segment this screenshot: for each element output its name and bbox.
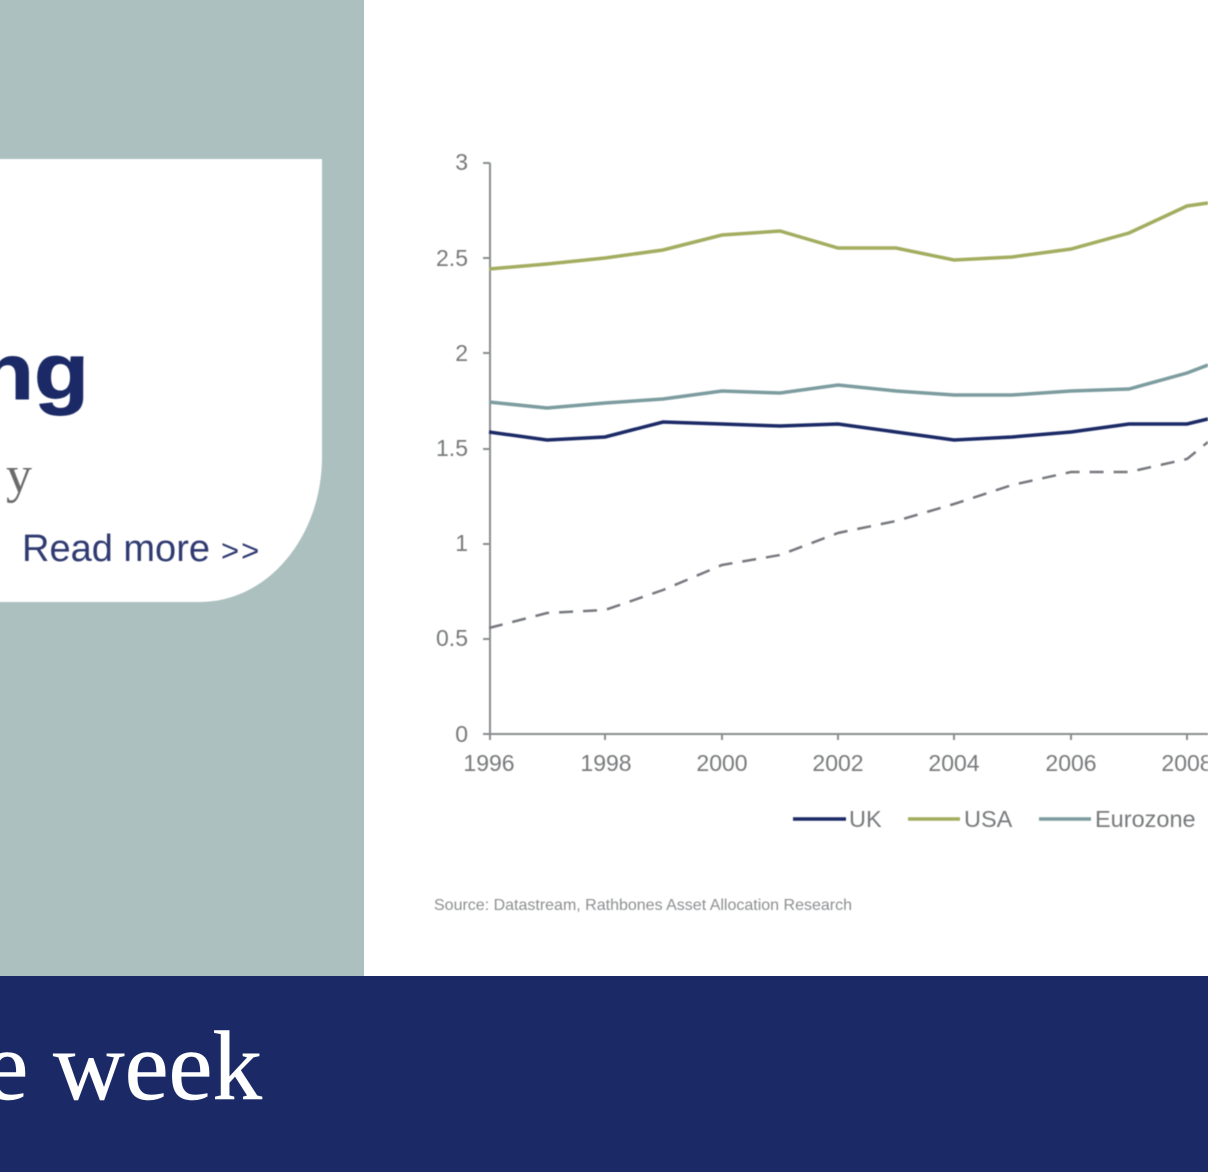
legend: Eurozone <box>1095 806 1196 832</box>
y axis labels: 0.5 <box>436 625 468 651</box>
panel: sage sidebar <box>0 0 364 976</box>
y axis labels: 2.5 <box>436 245 468 271</box>
legend: USA <box>964 806 1013 832</box>
x axis labels <box>463 750 1208 776</box>
series: UK <box>489 419 1208 440</box>
panel: white headline card: >> <box>221 533 261 568</box>
source note: Source: Datastream, Rathbones Asset Allocation Research <box>434 897 852 914</box>
y axis labels: 1 <box>455 530 468 556</box>
series: dashed fourth series <box>489 442 1208 628</box>
series: USA <box>489 203 1208 269</box>
y axis labels: 2 <box>455 340 468 366</box>
y axis labels <box>436 149 468 747</box>
legend <box>793 806 1196 832</box>
chart axes <box>483 163 1208 740</box>
panel: navy footer band <box>0 976 1208 1172</box>
panel: white headline card <box>0 159 322 602</box>
y axis labels: 0 <box>455 721 468 747</box>
legend: UK <box>849 806 882 832</box>
x axis labels: 2004 <box>928 750 980 776</box>
x axis labels: 2002 <box>812 750 864 776</box>
text block: cropped subheading: y <box>6 447 32 504</box>
y axis labels: 3 <box>455 149 468 175</box>
y axis labels: 1.5 <box>436 435 468 461</box>
x axis labels: 1998 <box>580 750 632 776</box>
x axis labels: 2006 <box>1045 750 1097 776</box>
series: Eurozone <box>489 365 1208 408</box>
link: read more: Read more <box>22 528 210 570</box>
x axis labels: 2000 <box>696 750 748 776</box>
x axis labels: 1996 <box>463 750 515 776</box>
